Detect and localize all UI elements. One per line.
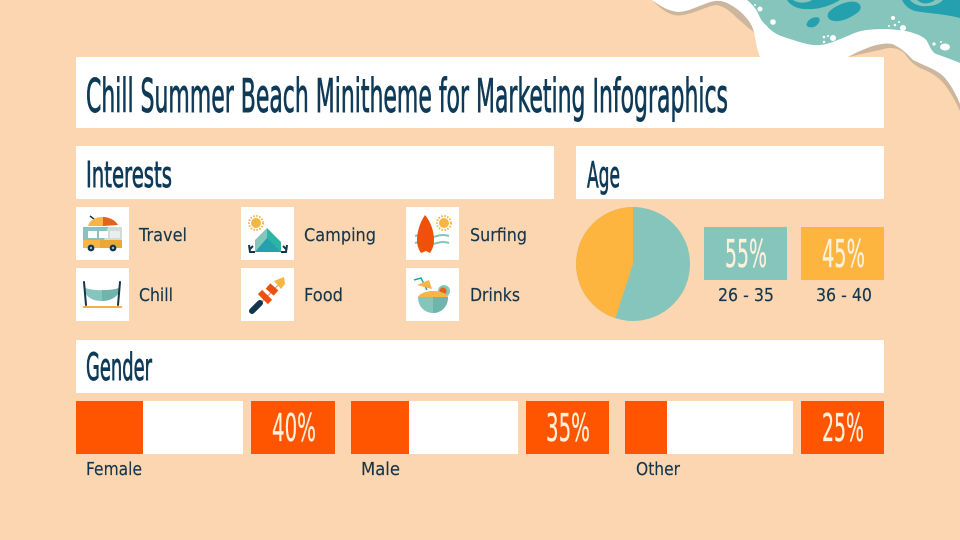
gender stat: female: 40% (272, 406, 316, 450)
icon: food skewer (241, 268, 294, 321)
label: drinks: Drinks (470, 286, 520, 306)
icon: camping tent (241, 207, 294, 260)
panel: gender heading: Gender (86, 346, 152, 389)
gender stat: male: Male (361, 460, 400, 480)
age pie chart (576, 207, 690, 321)
label: food: Food (304, 286, 343, 306)
label: surfing: Surfing (470, 226, 527, 246)
age stat: 26 - 35 (704, 227, 787, 306)
gender stat: male: 35% (546, 406, 590, 450)
panel: gender heading (76, 340, 884, 393)
icon: surfboard (406, 207, 459, 260)
age stat: 36 - 40 (801, 227, 884, 306)
label: travel: Travel (138, 226, 187, 246)
panel: interests heading: Interests (86, 155, 172, 196)
age stat: 36 - 40: 36 - 40 (816, 286, 872, 306)
panel: age heading: Age (587, 155, 620, 196)
icon: travel van (76, 207, 129, 260)
label: chill: Chill (139, 286, 173, 306)
gender stat: female: Female (86, 460, 142, 480)
gender stat: other: 25% (822, 406, 864, 450)
age stat: 26 - 35: 26 - 35 (718, 286, 774, 306)
age stat: 26 - 35: 55% (725, 232, 767, 276)
icon: hammock (76, 268, 129, 321)
gender stat: other: Other (636, 460, 681, 480)
label: camping: Camping (304, 226, 376, 246)
icon: coconut drink (406, 268, 459, 321)
title bar (76, 57, 884, 128)
gender stat: male (351, 401, 609, 480)
gender stat: female (76, 401, 335, 480)
panel: age heading (576, 146, 884, 199)
panel: interests heading (76, 146, 554, 199)
interests grid (76, 207, 527, 321)
beach wave decoration (652, 0, 960, 111)
gender stat: other (625, 401, 884, 480)
age stat: 36 - 40: 45% (822, 232, 865, 276)
